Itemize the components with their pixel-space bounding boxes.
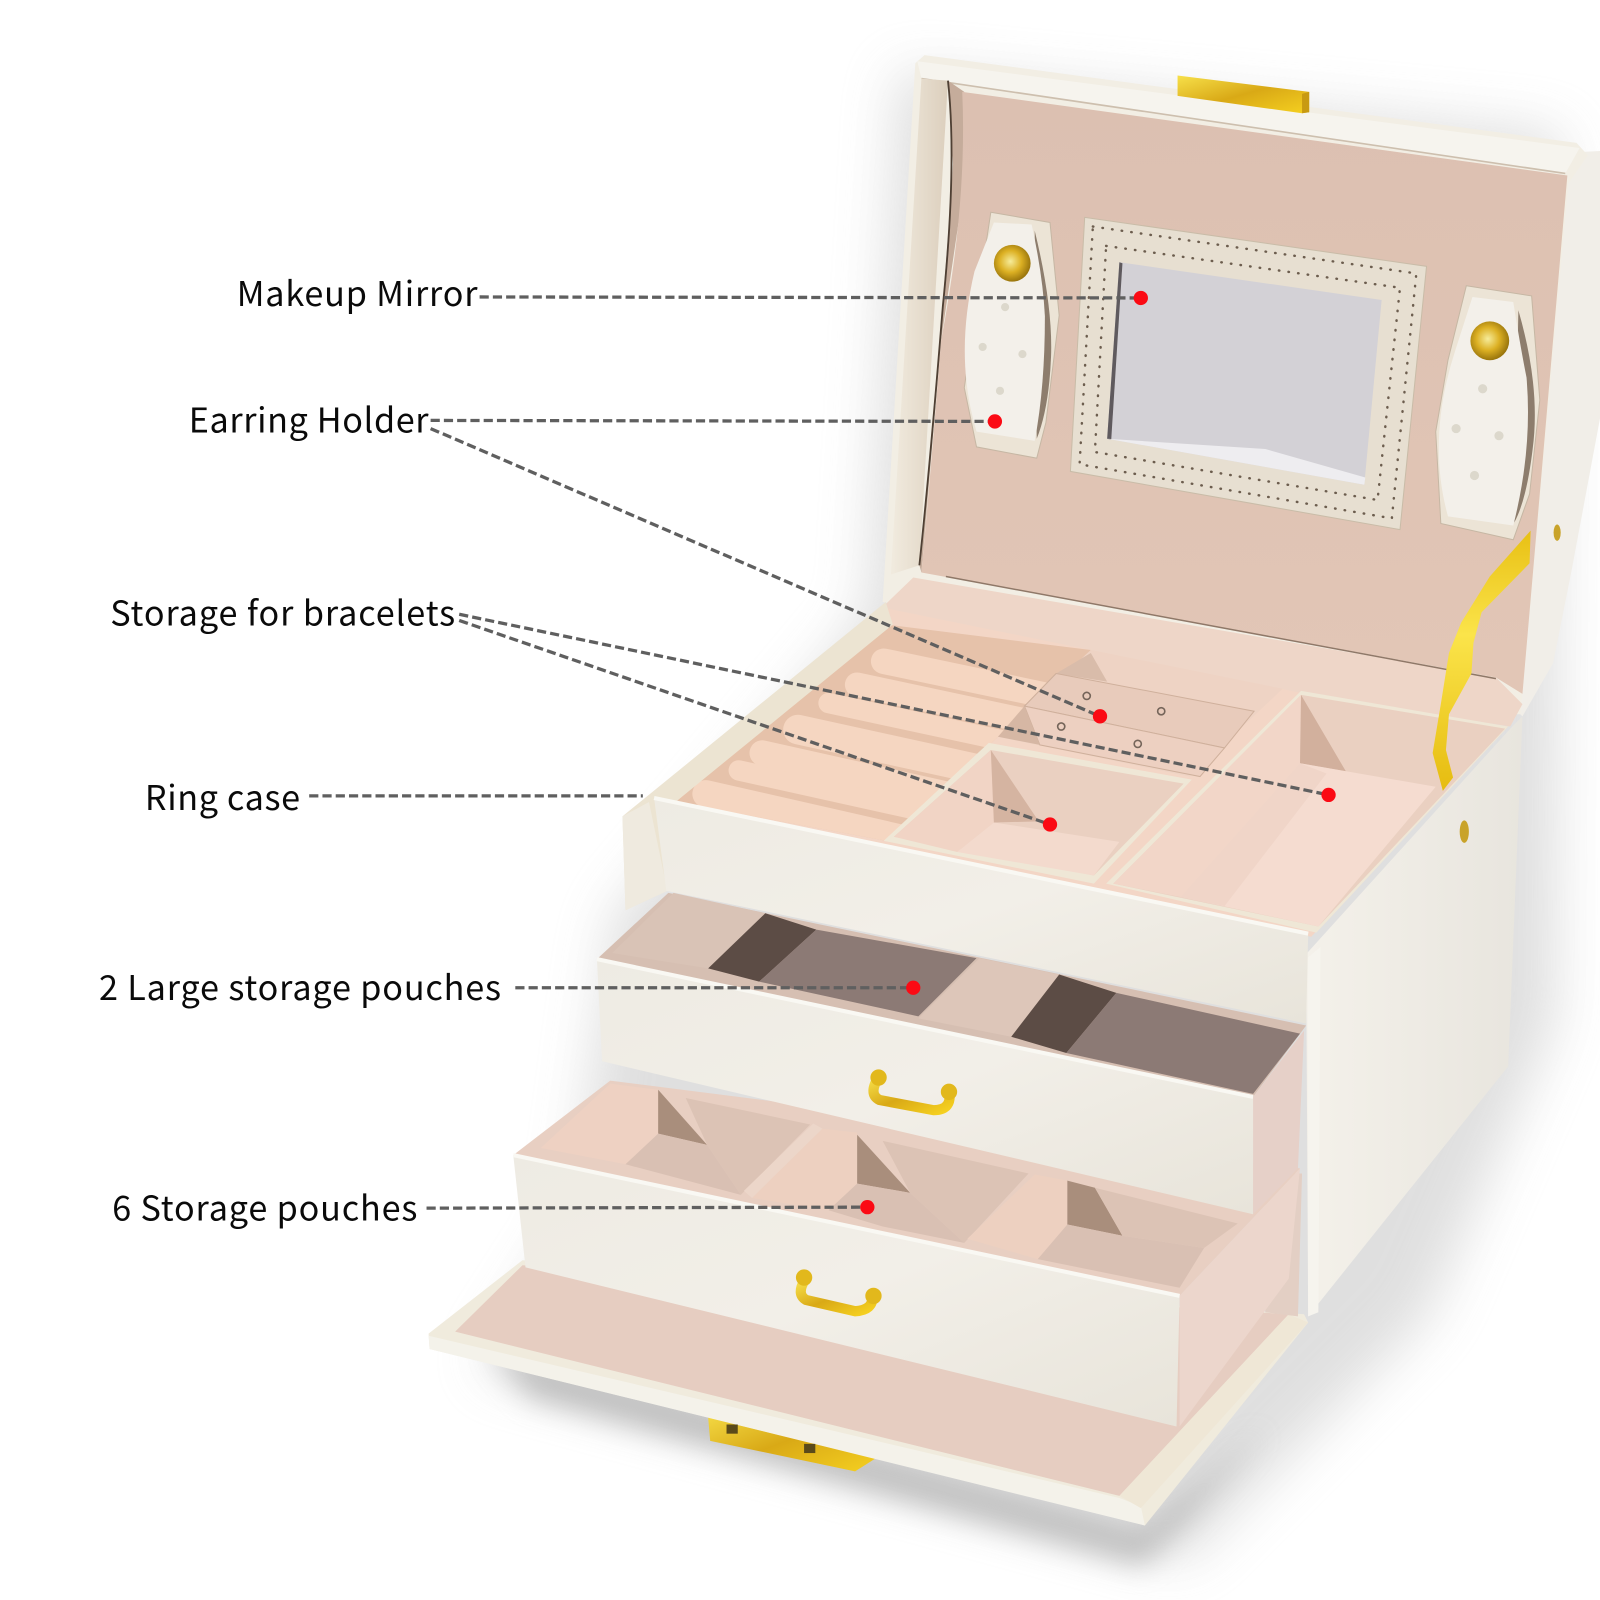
label: ring case: Ring case xyxy=(145,770,300,820)
dark inner seam xyxy=(919,81,952,565)
right body wall xyxy=(1306,716,1522,1316)
line: earring holder xyxy=(431,420,995,421)
line: earring holder pouch xyxy=(431,429,1100,716)
right compartment shadow xyxy=(1011,974,1116,1053)
gold hinge strap xyxy=(1433,531,1531,791)
compartment 3 xyxy=(967,1174,1067,1259)
left compartment wall xyxy=(612,893,765,968)
center square compartment xyxy=(884,743,1192,884)
left compartment floor xyxy=(759,930,977,1016)
ring case rolls xyxy=(677,625,1090,840)
line: bracelets center compartment xyxy=(459,620,1050,824)
lid pink lining xyxy=(921,92,1567,694)
compartment 1 xyxy=(541,1084,658,1164)
line: ring case xyxy=(309,794,643,798)
label: 2 large storage pouches: 2 Large storage pouches xyxy=(99,960,501,1010)
earring holder right xyxy=(1436,286,1540,540)
earring pouch compartment xyxy=(998,650,1283,777)
red marker dots xyxy=(860,291,1336,1214)
door pink lining and cream border xyxy=(429,1173,1308,1526)
tray base xyxy=(654,608,1508,937)
open lid xyxy=(878,55,1600,727)
line: storage pouches xyxy=(427,1207,867,1208)
line: bracelets long compartment xyxy=(459,614,1329,795)
upper drawer with two large pouches xyxy=(597,893,1306,1214)
label: storage for bracelets: Storage for bracelets xyxy=(110,586,455,636)
compartment 2 xyxy=(752,1129,857,1210)
lid side rivet xyxy=(1554,524,1561,541)
lower drawer handle xyxy=(796,1269,882,1311)
right compartment floor xyxy=(1066,993,1300,1094)
drawer white front xyxy=(513,1155,1180,1427)
drawer interior xyxy=(513,1081,1300,1296)
leader lines xyxy=(309,297,1329,1208)
makeup mirror with stitched frame xyxy=(1070,217,1427,530)
top tier tray xyxy=(622,602,1508,1023)
label: 6 storage pouches: 6 Storage pouches xyxy=(112,1180,417,1230)
lid outer frame xyxy=(883,55,1588,714)
long right compartment xyxy=(1106,691,1508,933)
lid left inner wall xyxy=(891,79,948,574)
lid hinge band xyxy=(878,578,1522,727)
drawer right side xyxy=(1180,1168,1300,1427)
bottom gold clasp xyxy=(707,1406,878,1471)
center divider xyxy=(918,958,1059,1037)
left cream rim xyxy=(622,602,893,910)
upper drawer handle xyxy=(870,1069,957,1110)
soft drop shadow xyxy=(480,71,1561,1566)
lid right side panel xyxy=(1510,151,1600,716)
line: large pouches xyxy=(515,986,913,989)
earring holder left xyxy=(964,212,1059,458)
gold top clasp xyxy=(1178,76,1309,113)
label: earring holder: Earring Holder xyxy=(189,393,429,443)
tray white front panel xyxy=(654,798,1308,1023)
drawer white front xyxy=(597,959,1253,1214)
clasp holes xyxy=(727,1424,815,1453)
lid top band highlight xyxy=(917,61,1580,173)
lid lining shadow strip xyxy=(919,81,967,572)
label: makeup mirror: Makeup Mirror xyxy=(237,266,478,316)
lower drawer with six pouches xyxy=(513,1081,1300,1427)
line: makeup mirror xyxy=(480,297,1141,298)
drawer right side xyxy=(1253,1031,1304,1214)
